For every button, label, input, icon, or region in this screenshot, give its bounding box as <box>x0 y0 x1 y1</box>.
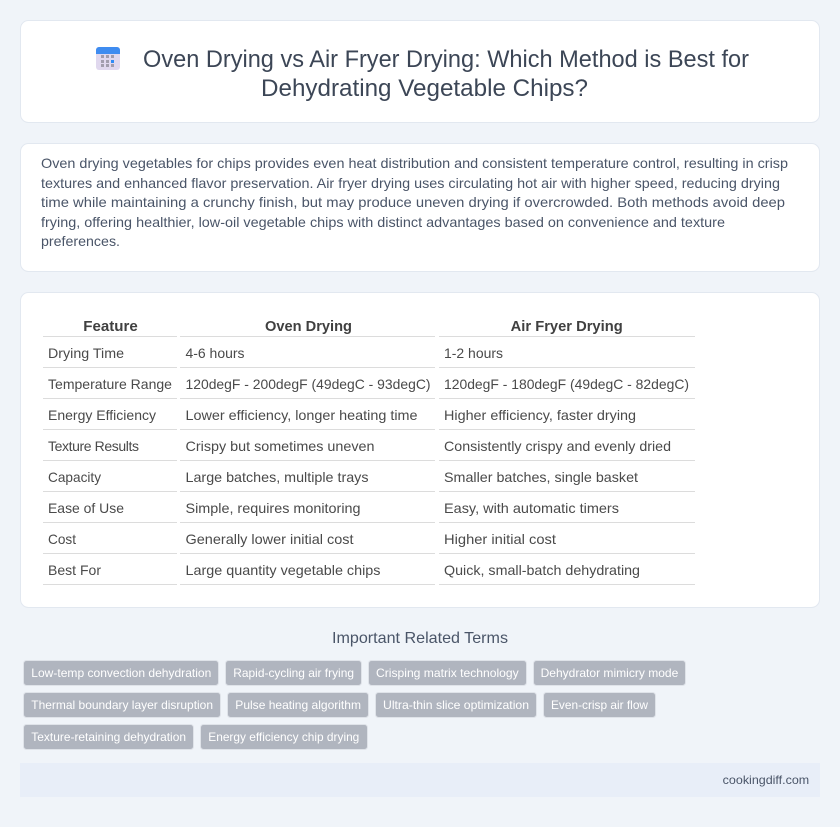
tags: related terms: Thermal boundary layer disruption <box>31 698 213 712</box>
text block: summary: Oven drying vegetables for chips provides even heat distribution and consistent temperature control, resulting in crisp <box>41 155 788 171</box>
row: ease of use: Ease of Use <box>48 500 124 516</box>
row: temperature range: Temperature Range <box>48 376 172 392</box>
tags: related terms: Low-temp convection dehydration <box>31 666 211 680</box>
panel: header <box>20 20 820 122</box>
title: Dehydrating Vegetable Chips? <box>261 75 588 102</box>
text block: summary: preferences. <box>41 233 120 249</box>
text block: summary <box>41 155 788 249</box>
table header row: Feature <box>83 319 138 335</box>
row: capacity: Capacity <box>48 469 101 485</box>
tags: related terms: Crisping matrix technology <box>376 666 519 680</box>
row: ease of use: Simple, requires monitoring <box>186 500 360 516</box>
row: texture results: Texture Results <box>48 438 139 454</box>
row: capacity <box>48 469 638 485</box>
text block: summary: time while maintaining a crunchy finish, but may produce uneven drying if overcrowded. Both methods avoid deep <box>41 194 785 210</box>
row: texture results <box>48 438 671 454</box>
row: best for: Quick, small-batch dehydrating <box>444 562 640 578</box>
heading: important related terms: Important Related Terms <box>332 630 508 647</box>
footer bar <box>20 763 820 797</box>
row: ease of use <box>48 500 619 516</box>
tags: related terms: Pulse heating algorithm <box>235 698 361 712</box>
title: Oven Drying vs Air Fryer Drying: Which Method is Best for <box>143 46 749 73</box>
row: texture results: Crispy but sometimes uneven <box>186 438 374 454</box>
row: best for: Large quantity vegetable chips <box>186 562 380 578</box>
tags: related terms: Energy efficiency chip drying <box>208 730 359 744</box>
icon: calendar grid <box>96 47 120 70</box>
row: energy efficiency: Energy Efficiency <box>48 407 156 423</box>
table header row: Air Fryer Drying <box>511 319 623 335</box>
table header row <box>83 319 623 335</box>
row: capacity: Large batches, multiple trays <box>186 469 368 485</box>
row: temperature range <box>48 376 689 392</box>
row: ease of use: Easy, with automatic timers <box>444 500 619 516</box>
tags: related terms <box>24 660 686 750</box>
panel: comparison table <box>20 292 820 608</box>
row: energy efficiency: Higher efficiency, faster drying <box>444 407 636 423</box>
row: temperature range: 120degF - 200degF (49degC - 93degC) <box>186 376 430 392</box>
table header row: Oven Drying <box>265 319 352 335</box>
row: texture results: Consistently crispy and evenly dried <box>444 438 671 454</box>
tags: related terms: Texture-retaining dehydration <box>31 730 186 744</box>
text block: summary: textures and enhanced flavor preservation. Air fryer drying uses circulating hot air with higher speed, reducing drying <box>41 175 780 191</box>
row: cost <box>48 531 556 547</box>
row: drying time <box>48 345 503 361</box>
row: best for: Best For <box>48 562 101 578</box>
tags: related terms: Rapid-cycling air frying <box>233 666 354 680</box>
text block: summary: frying, offering healthier, low-oil vegetable chips with distinct advantages based on convenience and texture <box>41 214 725 230</box>
footer: source: cookingdiff.com <box>723 773 809 787</box>
row: temperature range: 120degF - 180degF (49degC - 82degC) <box>444 376 689 392</box>
tags: related terms: Ultra-thin slice optimization <box>383 698 529 712</box>
tags: related terms: Dehydrator mimicry mode <box>541 666 679 680</box>
row: capacity: Smaller batches, single basket <box>444 469 638 485</box>
row: energy efficiency <box>48 407 636 423</box>
row: drying time: 4-6 hours <box>186 345 244 361</box>
tags: related terms: Even-crisp air flow <box>551 698 648 712</box>
row: drying time: Drying Time <box>48 345 124 361</box>
row: cost: Higher initial cost <box>444 531 556 547</box>
row: best for <box>48 562 640 578</box>
panel: summary paragraph <box>20 144 820 272</box>
row: cost: Generally lower initial cost <box>186 531 354 547</box>
title <box>143 46 749 102</box>
row: drying time: 1-2 hours <box>444 345 503 361</box>
row: energy efficiency: Lower efficiency, longer heating time <box>186 407 418 423</box>
row: cost: Cost <box>48 531 76 547</box>
